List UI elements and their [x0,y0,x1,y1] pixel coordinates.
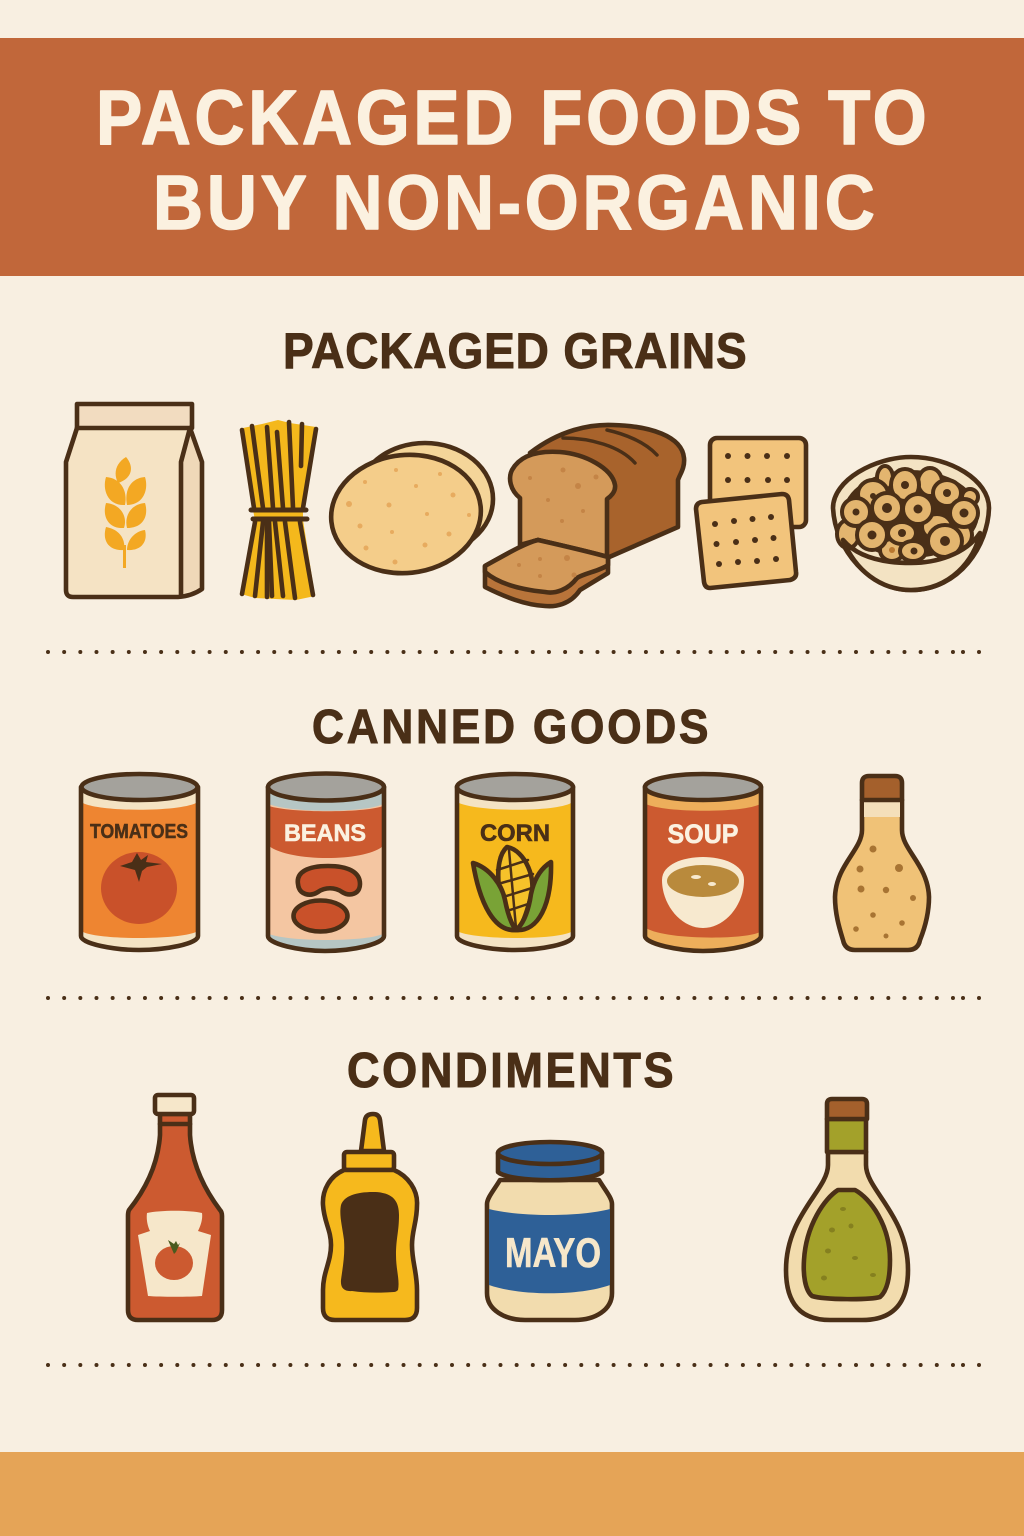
icon: can of corn: CORN [480,820,550,847]
icon: crackers [696,438,806,588]
soup bowl [662,857,744,928]
header banner [0,38,1024,276]
icon: flour bag [66,404,202,597]
heading: condiments: CONDIMENTS [347,1042,674,1097]
icon: can of soup: SOUP [668,819,738,849]
title: PACKAGED FOODS TO [96,75,927,161]
icon: spaghetti bundle [241,420,316,600]
icon: can of corn [457,774,573,950]
heading: canned goods: CANNED GOODS [312,699,709,753]
icon: mayo jar [487,1142,612,1320]
icon: can of beans: BEANS [284,820,366,847]
tomato [101,852,177,924]
icon: tortillas [325,443,493,581]
icon: bread loaf [485,425,684,606]
icon: ranch dressing bottle [786,1099,908,1320]
icon: can of beans [268,774,384,951]
wheat emblem [105,457,146,568]
title: BUY NON-ORGANIC [153,160,875,246]
divider dots [48,996,981,1000]
ketchup label [138,1211,211,1297]
divider dots [48,650,981,654]
heading: packaged grains: PACKAGED GRAINS [283,324,747,379]
icon: mayo jar: MAYO [505,1229,601,1276]
divider dots [48,1363,981,1367]
title [96,75,927,246]
icon: cereal bowl [833,457,989,590]
icon: dressing bottle [835,776,929,950]
icon: ketchup bottle [128,1095,222,1320]
bowl front [843,533,980,590]
icon: mustard bottle [323,1114,417,1320]
icon: can of soup [645,774,761,951]
footer band [0,1452,1024,1536]
icon: can of tomatoes: TOMATOES [90,821,188,843]
icon: can of tomatoes [81,774,198,950]
corn cob [498,847,532,930]
cereal rings [837,466,978,561]
